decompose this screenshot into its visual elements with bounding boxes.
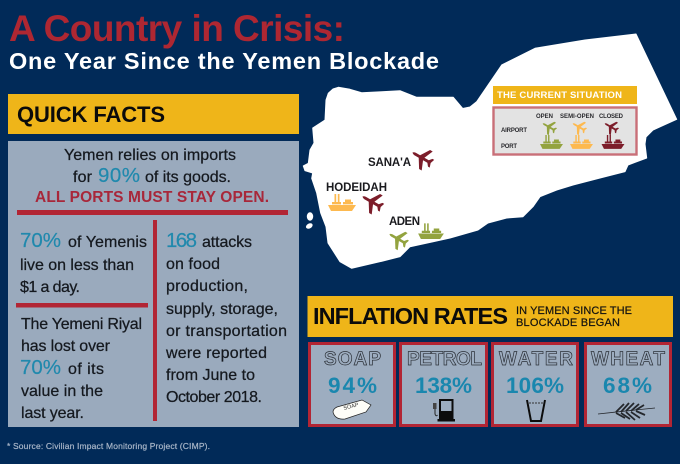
map of Yemen xyxy=(303,34,677,268)
attacks fact: production, xyxy=(166,278,248,295)
card: petrol: 138% xyxy=(415,373,472,398)
imports fact: 90% xyxy=(98,164,140,187)
title: A Country in Crisis: xyxy=(9,8,345,49)
legend: the current situation: THE CURRENT SITUATION xyxy=(497,90,622,101)
poverty fact: live on less than xyxy=(20,257,134,274)
riyal fact: of its xyxy=(68,361,104,378)
city: Hodeidah: HODEIDAH xyxy=(326,182,387,194)
riyal fact xyxy=(20,316,142,422)
attacks fact: October 2018. xyxy=(166,389,262,406)
legend: the current situation: AIRPORT xyxy=(501,128,527,134)
city: Sana'a: SANA'A xyxy=(368,157,411,169)
card: wheat: 68% xyxy=(603,373,652,398)
legend: the current situation: OPEN xyxy=(536,114,553,120)
attacks fact: 168 xyxy=(166,229,197,252)
legend: the current situation: CLOSED xyxy=(599,114,624,120)
card: wheat: WHEAT xyxy=(591,349,665,370)
attacks fact: supply, storage, xyxy=(166,301,278,318)
riyal fact: 70% xyxy=(20,356,61,379)
card: soap xyxy=(310,344,394,426)
riyal fact: value in the xyxy=(21,383,103,400)
attacks fact: were reported xyxy=(165,345,267,362)
city: Hodeidah xyxy=(326,182,387,217)
legend: the current situation xyxy=(493,86,637,154)
poverty fact: $1 a day. xyxy=(20,279,80,296)
riyal fact: has lost over xyxy=(21,338,111,355)
card: water xyxy=(492,344,578,426)
city: Aden: ADEN xyxy=(389,216,420,228)
icon: wheat stalk xyxy=(598,403,655,420)
imports fact xyxy=(35,147,269,206)
card: petrol: PETROL xyxy=(407,349,482,370)
attacks fact: from June to xyxy=(166,367,255,384)
attacks fact: on food xyxy=(166,256,220,273)
heading: inflation rates: INFLATION RATES xyxy=(313,303,508,329)
legend: the current situation: SEMI-OPEN xyxy=(560,114,594,120)
imports fact: Yemen relies on imports xyxy=(64,147,236,164)
attacks fact xyxy=(165,229,287,406)
poverty fact: of Yemenis xyxy=(68,234,147,251)
heading: inflation rates xyxy=(308,296,673,337)
title: One Year Since the Yemen Blockade xyxy=(9,48,439,74)
card: soap: 94% xyxy=(328,373,377,398)
panel: quick facts xyxy=(8,141,299,427)
card: water: WATER xyxy=(499,349,573,370)
heading: quick facts xyxy=(8,94,299,134)
riyal fact: The Yemeni Riyal xyxy=(21,316,142,333)
poverty fact: 70% xyxy=(20,229,61,252)
poverty fact xyxy=(20,229,147,296)
heading: quick facts: QUICK FACTS xyxy=(17,102,165,127)
city: Aden xyxy=(384,216,444,253)
source note: * Source: Civilian Impact Monitoring Project (CIMP). xyxy=(7,441,210,451)
title xyxy=(9,8,439,74)
icon: glass of water xyxy=(527,400,545,421)
card: petrol xyxy=(400,344,486,426)
heading: inflation rates: IN YEMEN SINCE THE xyxy=(516,305,632,317)
attacks fact: attacks xyxy=(202,234,252,251)
city: Sana'a xyxy=(368,143,437,173)
card: water: 106% xyxy=(506,373,564,398)
imports fact: ALL PORTS MUST STAY OPEN. xyxy=(35,189,269,206)
card: wheat xyxy=(586,344,670,426)
icon: fuel pump xyxy=(433,399,455,422)
icon: soap bar: SOAP xyxy=(343,402,360,412)
heading: inflation rates: BLOCKADE BEGAN xyxy=(516,317,620,329)
riyal fact: last year. xyxy=(21,405,84,422)
legend: the current situation: PORT xyxy=(501,144,517,150)
imports fact: for xyxy=(73,169,93,186)
card: soap: SOAP xyxy=(324,349,381,370)
attacks fact: or transportation xyxy=(166,323,287,340)
imports fact: of its goods. xyxy=(145,169,231,186)
